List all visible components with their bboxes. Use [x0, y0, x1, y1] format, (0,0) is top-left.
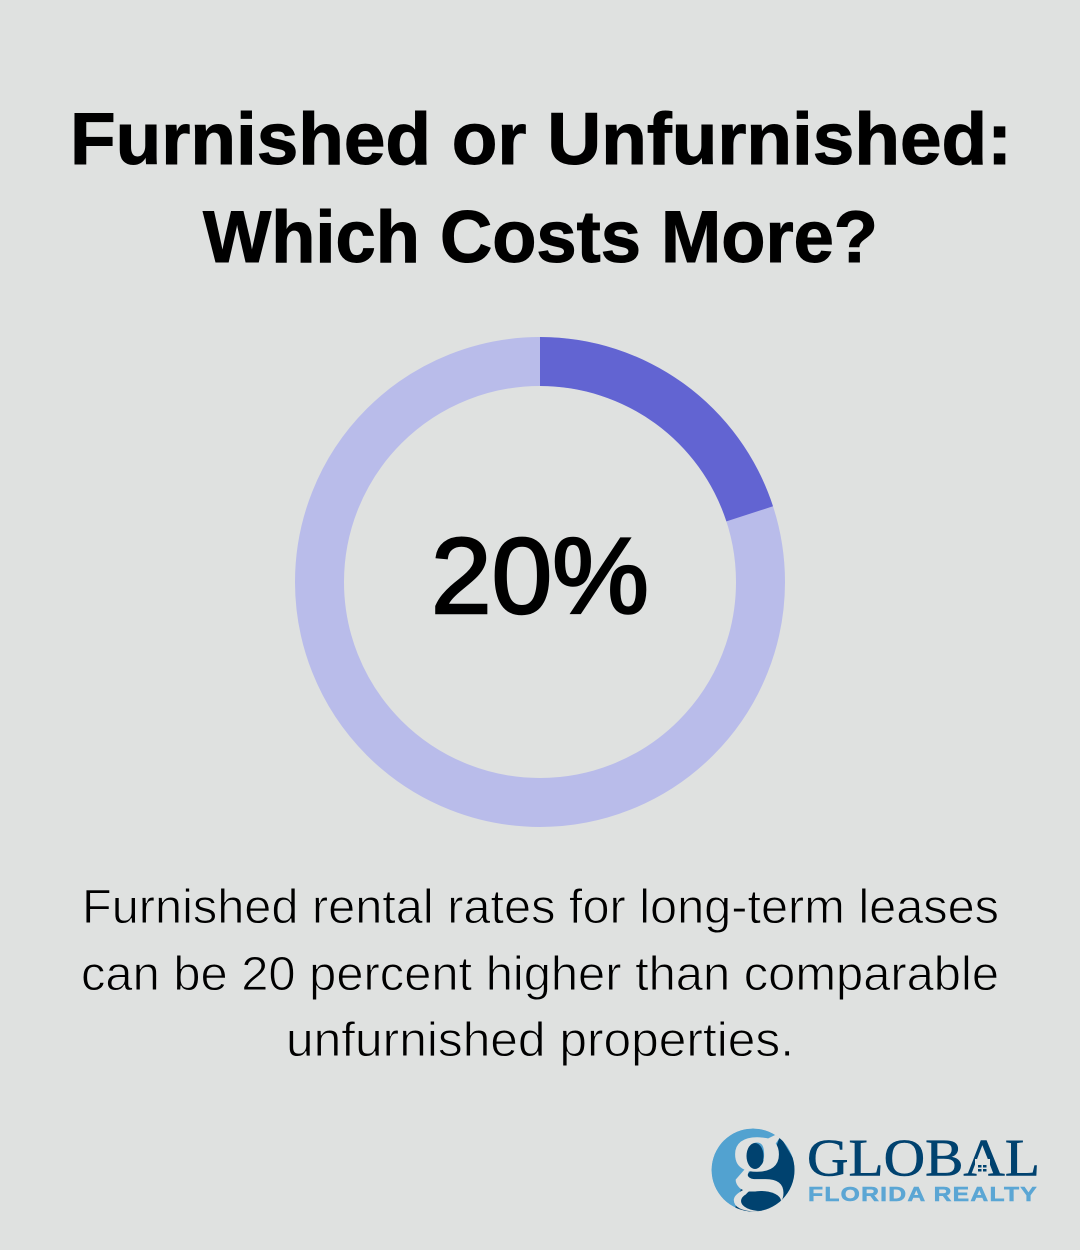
logo icon: circle with g: g [731, 1094, 784, 1212]
logo wordmark: FLORIDA REALTY: FLORIDA REALTY [808, 1184, 1038, 1206]
title: Which Costs More? [203, 197, 878, 278]
title: Furnished or Unfurnished: [70, 99, 1012, 180]
donut chart: 20 percent [320, 337, 773, 802]
icon: house window in logo [975, 1159, 990, 1172]
title [70, 99, 1012, 278]
logo icon: circle with g [712, 1128, 794, 1212]
description text: unfurnished properties. [286, 1014, 794, 1067]
donut value: 20% [431, 515, 649, 636]
logo wordmark: GLOBAL: GLOBAL [807, 1130, 1040, 1188]
description text: can be 20 percent higher than comparable [81, 948, 999, 1001]
logo: Global Florida Realty [712, 1128, 1037, 1212]
description text: Furnished rental rates for long-term leases [82, 881, 999, 934]
description text [81, 881, 999, 1067]
